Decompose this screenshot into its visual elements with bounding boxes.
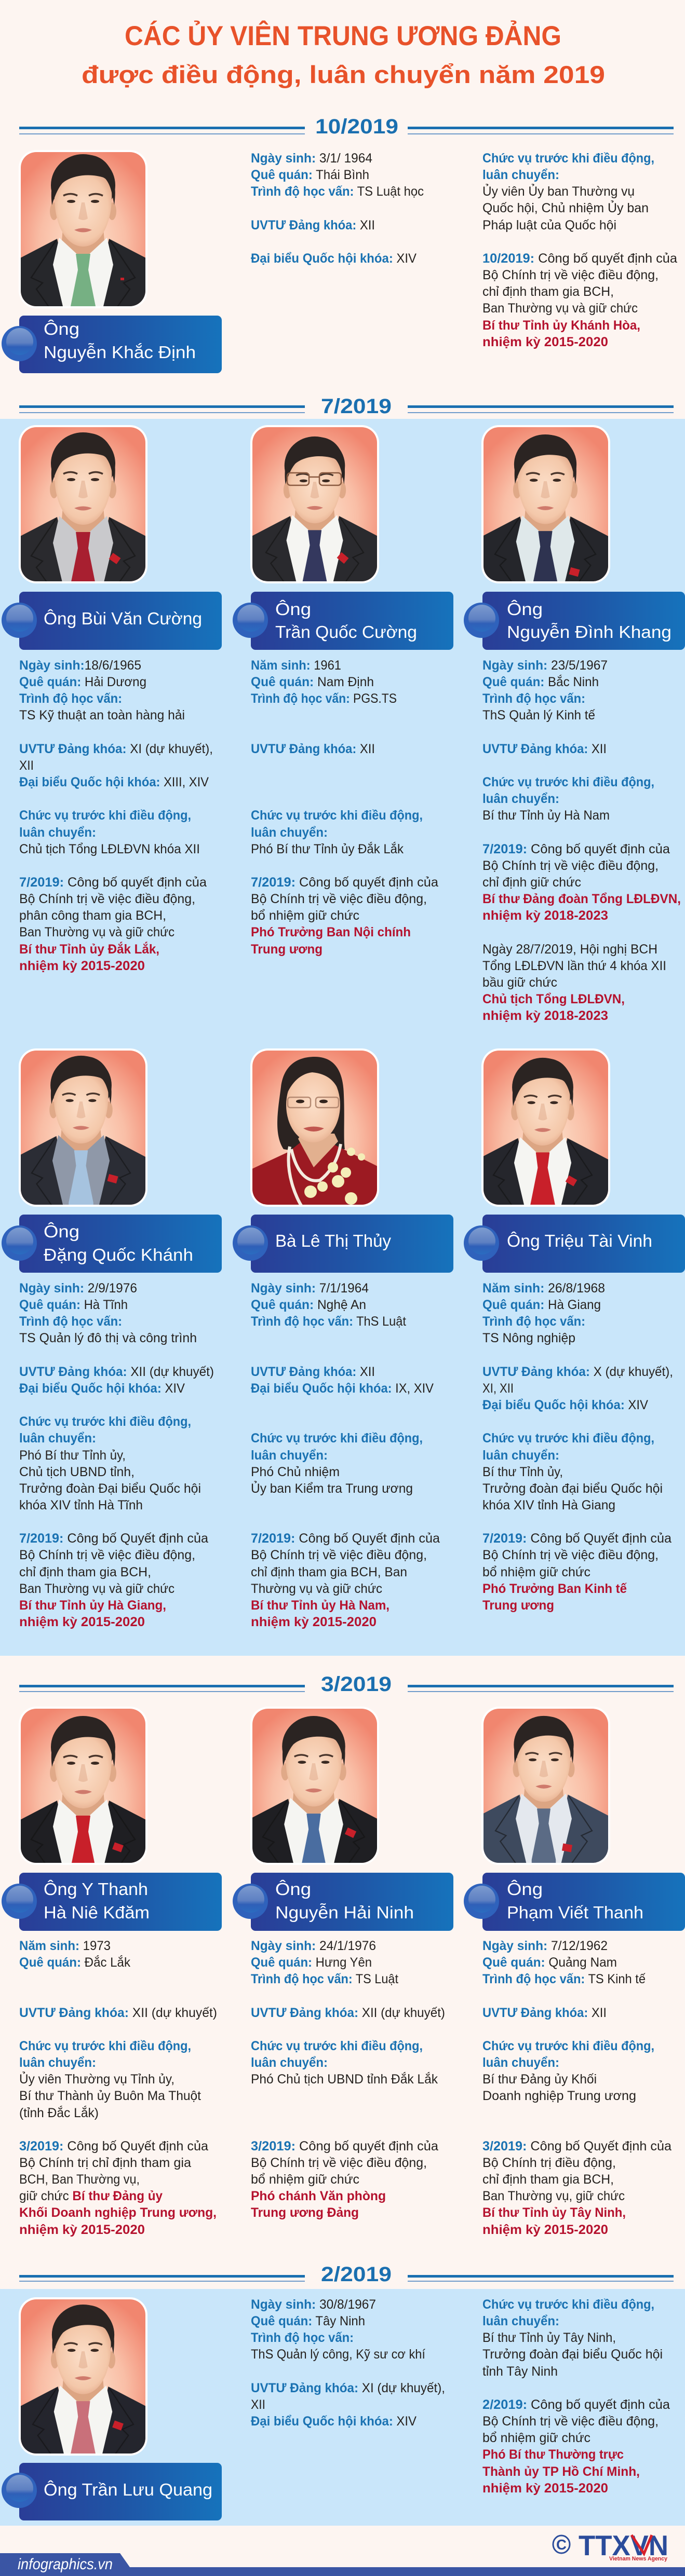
career: Trần Lưu Quang: bổ nhiệm giữ chức [482, 2431, 590, 2445]
career: Trần Lưu Quang: Thành ủy TP Hồ Chí Minh, [482, 2464, 640, 2479]
bio: Y Thanh Hà Niê Kđăm [19, 1939, 217, 2237]
bio: Y Thanh Hà Niê Kđăm: (tỉnh Đắc Lắk) [19, 2105, 99, 2120]
bio: Trần Quốc Cường: Phó Bí thư Tỉnh ủy Đắk Lắk [251, 841, 404, 856]
bio: Trần Quốc Cường: Quê quán: Nam Định [251, 675, 374, 689]
bio: Lê Thị Thủy: chỉ định tham gia BCH, Ban [251, 1565, 407, 1579]
bio: Trần Quốc Cường: Chức vụ trước khi điều động, [251, 808, 423, 823]
bio: Triệu Tài Vinh: Trình độ học vấn: [482, 1314, 585, 1329]
title [82, 20, 605, 88]
section heading: 7/2019 [19, 395, 674, 418]
bio: Trần Lưu Quang: Trình độ học vấn: [251, 2330, 354, 2345]
panel: 2/2019 [0, 2289, 685, 2526]
panel: 7/2019 [0, 419, 685, 1656]
bio: Y Thanh Hà Niê Kđăm: nhiệm kỳ 2015-2020 [19, 2223, 145, 2237]
bio: Nguyễn Đình Khang: Bộ Chính trị về việc điều động, [482, 858, 659, 873]
name banner: Bùi Văn Cường [2, 592, 222, 650]
bio: Lê Thị Thủy: Trình độ học vấn: ThS Luật [251, 1314, 406, 1329]
bio: Nguyễn Đình Khang: Chức vụ trước khi điều động, [482, 775, 654, 789]
bio: Triệu Tài Vinh: Đại biểu Quốc hội khóa: XIV [482, 1398, 648, 1412]
name banner: Trần Quốc Cường: Ông [275, 599, 311, 619]
bio: Y Thanh Hà Niê Kđăm: luân chuyển: [19, 2055, 96, 2070]
section heading: 7/2019: 7/2019 [321, 395, 392, 418]
bio: Nguyễn Hải Ninh: 3/2019: Công bố quyết định của [251, 2139, 438, 2154]
bio: Y Thanh Hà Niê Kđăm: Khối Doanh nghiệp Trung ương, [19, 2205, 217, 2220]
bio: Bùi Văn Cường: phân công tham gia BCH, [19, 908, 166, 923]
portrait: Triệu Tài Vinh [481, 1048, 610, 1207]
bio: Trần Quốc Cường: Bộ Chính trị về việc điều động, [251, 892, 427, 906]
career: Nguyễn Khắc Định: Ủy viên Ủy ban Thường vụ [482, 183, 635, 199]
bio: Trần Lưu Quang: Đại biểu Quốc hội khóa: XIV [251, 2414, 417, 2429]
bio: Triệu Tài Vinh: 7/2019: Công bố Quyết định của [482, 1531, 671, 1546]
bio: Triệu Tài Vinh: Phó Trưởng Ban Kinh tế [482, 1582, 627, 1596]
career: Nguyễn Khắc Định [482, 151, 677, 349]
portrait: Nguyễn Hải Ninh [250, 1707, 379, 1865]
bio: Đặng Quốc Khánh: Trưởng đoàn Đại biểu Quốc hội [19, 1481, 201, 1496]
career: Trần Lưu Quang: Trưởng đoàn đại biểu Quốc hội [482, 2347, 663, 2362]
section heading: 2/2019 [19, 2263, 674, 2286]
portrait: Nguyễn Đình Khang [481, 425, 610, 583]
name banner: Nguyễn Khắc Định: Nguyễn Khắc Định [44, 343, 196, 362]
bio: Trần Lưu Quang [251, 2297, 445, 2429]
name banner: Lê Thị Thủy: Bà Lê Thị Thủy [275, 1231, 391, 1250]
bio: Nguyễn Đình Khang: 7/2019: Công bố quyết định của [482, 842, 670, 856]
career: Nguyễn Khắc Định: Quốc hội, Chủ nhiệm Ủy ban [482, 200, 649, 215]
bio: Đặng Quốc Khánh: Quê quán: Hà Tĩnh [19, 1298, 128, 1312]
bio: Triệu Tài Vinh: TS Nông nghiệp [482, 1331, 575, 1345]
bio: Đặng Quốc Khánh: TS Quản lý đô thị và công trình [19, 1331, 197, 1345]
name banner: Triệu Tài Vinh: Ông Triệu Tài Vinh [507, 1231, 652, 1250]
bio: Lê Thị Thủy: Chức vụ trước khi điều động, [251, 1431, 423, 1446]
section heading: 2/2019: 2/2019 [321, 2263, 392, 2286]
logo: TTXVN: C [556, 2537, 567, 2553]
name banner: Nguyễn Hải Ninh: Ông [275, 1879, 311, 1899]
bio: Nguyễn Đình Khang: bầu giữ chức [482, 975, 557, 990]
bio: Phạm Viết Thanh: Ngày sinh: 7/12/1962 [482, 1939, 608, 1953]
bio: Nguyễn Hải Ninh: Bộ Chính trị về việc điều động, [251, 2156, 427, 2170]
bio: Nguyễn Đình Khang: chỉ định giữ chức [482, 875, 581, 890]
bio: Triệu Tài Vinh: Bộ Chính trị về việc điều động, [482, 1548, 659, 1562]
career: Trần Lưu Quang: Chức vụ trước khi điều động, [482, 2297, 654, 2312]
bio: Nguyễn Khắc Định: Đại biểu Quốc hội khóa: XIV [251, 251, 417, 266]
bio: Trần Quốc Cường: Trung ương [251, 942, 323, 957]
name banner: Nguyễn Hải Ninh [233, 1873, 453, 1931]
portrait: Phạm Viết Thanh [481, 1707, 610, 1865]
career: Trần Lưu Quang: nhiệm kỳ 2015-2020 [482, 2481, 608, 2496]
bio: Triệu Tài Vinh: Quê quán: Hà Giang [482, 1298, 601, 1312]
section heading: 10/2019: 10/2019 [315, 115, 398, 138]
bio: Lê Thị Thủy: Ủy ban Kiểm tra Trung ương [251, 1480, 413, 1496]
career: Trần Lưu Quang [482, 2297, 670, 2496]
name banner: Phạm Viết Thanh: Phạm Viết Thanh [507, 1903, 643, 1922]
name banner: Bùi Văn Cường: Ông Bùi Văn Cường [44, 609, 202, 628]
bio: Nguyễn Khắc Định: UVTƯ Đảng khóa: XII [251, 218, 375, 233]
bio: Bùi Văn Cường: XII [19, 758, 34, 773]
bio: Y Thanh Hà Niê Kđăm: Quê quán: Đắc Lắk [19, 1955, 130, 1970]
bio: Lê Thị Thủy: Ngày sinh: 7/1/1964 [251, 1281, 369, 1296]
name banner: Phạm Viết Thanh [464, 1873, 685, 1931]
section heading: 10/2019 [19, 115, 674, 138]
bio: Đặng Quốc Khánh: chỉ định tham gia BCH, [19, 1565, 151, 1579]
bio: Phạm Viết Thanh: Bí thư Tỉnh ủy Tây Ninh, [482, 2205, 626, 2220]
bio: Triệu Tài Vinh: Bí thư Tỉnh ủy, [482, 1465, 563, 1479]
bio: Triệu Tài Vinh: Năm sinh: 26/8/1968 [482, 1281, 605, 1296]
bio: Trần Lưu Quang: XII [251, 2397, 265, 2412]
career: Nguyễn Khắc Định: luân chuyển: [482, 168, 559, 182]
bio: Đặng Quốc Khánh: Đại biểu Quốc hội khóa: XIV [19, 1381, 185, 1396]
bio: Lê Thị Thủy: Bộ Chính trị về việc điều động, [251, 1548, 427, 1562]
bio: Nguyễn Hải Ninh: Ngày sinh: 24/1/1976 [251, 1939, 376, 1953]
bio: Bùi Văn Cường: Quê quán: Hải Dương [19, 675, 146, 689]
bio: Y Thanh Hà Niê Kđăm: 3/2019: Công bố Quyết định của [19, 2139, 208, 2154]
section heading: 3/2019 [19, 1673, 674, 1696]
portrait: Đặng Quốc Khánh [19, 1048, 147, 1207]
career: Nguyễn Khắc Định: Chức vụ trước khi điều động, [482, 151, 654, 166]
bio: Bùi Văn Cường: TS Kỹ thuật an toàn hàng hải [19, 708, 185, 723]
portrait: Y Thanh Hà Niê Kđăm [19, 1707, 147, 1865]
bio: Triệu Tài Vinh: Chức vụ trước khi điều động, [482, 1431, 654, 1446]
bio: Đặng Quốc Khánh: Chức vụ trước khi điều động, [19, 1414, 191, 1429]
bio: Nguyễn Khắc Định [251, 151, 424, 266]
bio: Phạm Viết Thanh: Doanh nghiệp Trung ương [482, 2089, 636, 2103]
bio: Trần Lưu Quang: Quê quán: Tây Ninh [251, 2314, 365, 2328]
bio: Trần Quốc Cường: Phó Trưởng Ban Nội chính [251, 925, 411, 939]
name banner: Đặng Quốc Khánh [2, 1215, 222, 1273]
name banner: Nguyễn Đình Khang: Nguyễn Đình Khang [507, 622, 671, 642]
bio: Triệu Tài Vinh: khóa XIV tỉnh Hà Giang [482, 1498, 615, 1512]
bio: Bùi Văn Cường: Bộ Chính trị về việc điều động, [19, 892, 195, 906]
bio: Nguyễn Hải Ninh: Phó chánh Văn phòng [251, 2189, 386, 2203]
name banner: Nguyễn Khắc Định [2, 316, 222, 373]
bio: Bùi Văn Cường: Chủ tịch Tổng LĐLĐVN khóa XII [19, 842, 200, 856]
bio: Lê Thị Thủy: Phó Chủ nhiệm [251, 1465, 340, 1479]
bio: Bùi Văn Cường: Bí thư Tỉnh ủy Đắk Lắk, [19, 941, 159, 957]
name banner: Triệu Tài Vinh [464, 1215, 685, 1273]
bio: Triệu Tài Vinh [482, 1281, 673, 1613]
bio: Nguyễn Đình Khang: luân chuyển: [482, 792, 559, 806]
career: Trần Lưu Quang: Phó Bí thư Thường trực [482, 2447, 624, 2462]
bio: Y Thanh Hà Niê Kđăm: Bí thư Thành ủy Buôn Ma Thuột [19, 2089, 201, 2103]
name banner: Đặng Quốc Khánh: Đặng Quốc Khánh [44, 1245, 193, 1264]
bio: Nguyễn Đình Khang: Quê quán: Bắc Ninh [482, 674, 599, 689]
bio: Triệu Tài Vinh: XI, XII [482, 1381, 514, 1396]
portrait: Nguyễn Khắc Định [19, 150, 147, 308]
bio: Phạm Viết Thanh: Trình độ học vấn: TS Kinh tế [482, 1972, 646, 1986]
bio: Lê Thị Thủy: 7/2019: Công bố Quyết định của [251, 1531, 440, 1546]
bio: Lê Thị Thủy: Bí thư Tỉnh ủy Hà Nam, [251, 1598, 389, 1613]
bio: Nguyễn Đình Khang: Tổng LĐLĐVN lần thứ 4 khóa XII [482, 959, 666, 973]
bio: Trần Lưu Quang: ThS Quản lý công, Kỹ sư cơ khí [251, 2347, 425, 2362]
name banner: Trần Quốc Cường [233, 592, 453, 650]
bio: Y Thanh Hà Niê Kđăm: Năm sinh: 1973 [19, 1939, 111, 1953]
bio: Y Thanh Hà Niê Kđăm: Bộ Chính trị chỉ định tham gia [19, 2156, 191, 2170]
bio: Trần Quốc Cường: luân chuyển: [251, 825, 328, 840]
name banner: Nguyễn Khắc Định: Ông [44, 319, 79, 338]
bio: Nguyễn Hải Ninh: bổ nhiệm giữ chức [251, 2172, 359, 2187]
bio: Nguyễn Đình Khang: Bí thư Đảng đoàn Tổng LĐLĐVN, [482, 892, 681, 906]
bio: Nguyễn Hải Ninh: Quê quán: Hưng Yên [251, 1955, 372, 1970]
career: Trần Lưu Quang: tỉnh Tây Ninh [482, 2364, 558, 2379]
bio: Triệu Tài Vinh: Trung ương [482, 1598, 554, 1613]
career: Trần Lưu Quang: Bí thư Tỉnh ủy Tây Ninh, [482, 2330, 616, 2345]
bio: Nguyễn Đình Khang: ThS Quản lý Kinh tế [482, 708, 595, 723]
bio: Bùi Văn Cường: Chức vụ trước khi điều động, [19, 808, 191, 823]
bio: Bùi Văn Cường: Ban Thường vụ và giữ chức [19, 925, 174, 939]
bio: Phạm Viết Thanh: Ban Thường vụ, giữ chức [482, 2189, 625, 2203]
bio: Đặng Quốc Khánh: Bí thư Tỉnh ủy Hà Giang, [19, 1598, 166, 1613]
name banner: Y Thanh Hà Niê Kđăm [2, 1873, 222, 1931]
bio: Đặng Quốc Khánh [19, 1281, 214, 1629]
bio: Trần Quốc Cường: bổ nhiệm giữ chức [251, 908, 359, 923]
bio: Nguyễn Hải Ninh: Trình độ học vấn: TS Luật [251, 1972, 398, 1986]
bio: Đặng Quốc Khánh: nhiệm kỳ 2015-2020 [19, 1615, 145, 1629]
section heading: 3/2019: 3/2019 [321, 1673, 392, 1696]
bio: Nguyễn Hải Ninh: Trung ương Đảng [251, 2205, 359, 2220]
bio: Nguyễn Hải Ninh: luân chuyển: [251, 2055, 328, 2070]
bio: Đặng Quốc Khánh: Trình độ học vấn: [19, 1314, 122, 1329]
bio: Phạm Viết Thanh: 3/2019: Công bố Quyết định của [482, 2139, 671, 2154]
portrait: Trần Lưu Quang [19, 2297, 147, 2456]
bio: Nguyễn Đình Khang: Ngày sinh: 23/5/1967 [482, 658, 608, 673]
bio: Đặng Quốc Khánh: UVTƯ Đảng khóa: XII (dự khuyết) [19, 1365, 214, 1379]
bio: Trần Lưu Quang: Ngày sinh: 30/8/1967 [251, 2297, 376, 2312]
bio: Lê Thị Thủy: nhiệm kỳ 2015-2020 [251, 1615, 377, 1629]
bio: Bùi Văn Cường: Đại biểu Quốc hội khóa: XIII, XIV [19, 775, 209, 789]
bio: Lê Thị Thủy: Thường vụ và giữ chức [251, 1582, 382, 1596]
bio: Triệu Tài Vinh: bổ nhiệm giữ chức [482, 1565, 590, 1579]
title: được điều động, luân chuyển năm 2019 [82, 61, 605, 88]
bio: Nguyễn Đình Khang: nhiệm kỳ 2018-2023 [482, 1008, 608, 1023]
career: Nguyễn Khắc Định: Pháp luật của Quốc hội [482, 218, 616, 233]
bio: Nguyễn Hải Ninh: Phó Chủ tịch UBND tỉnh Đắk Lắk [251, 2071, 438, 2087]
bio: Triệu Tài Vinh: Trưởng đoàn đại biểu Quốc hội [482, 1481, 663, 1496]
bio: Trần Quốc Cường: 7/2019: Công bố quyết định của [251, 875, 438, 890]
bio: Bùi Văn Cường: nhiệm kỳ 2015-2020 [19, 959, 145, 973]
name banner: Trần Lưu Quang: Ông Trần Lưu Quang [44, 2480, 212, 2499]
bio: Trần Quốc Cường: Năm sinh: 1961 [251, 658, 341, 673]
name banner: Y Thanh Hà Niê Kđăm: Hà Niê Kđăm [44, 1903, 150, 1922]
bio: Trần Quốc Cường: Trình độ học vấn: PGS.TS [251, 691, 397, 706]
bio: Nguyễn Khắc Định: Trình độ học vấn: TS Luật học [251, 184, 424, 199]
bio: Phạm Viết Thanh [482, 1939, 671, 2237]
career: Nguyễn Khắc Định: Bộ Chính trị về việc điều động, [482, 268, 659, 282]
bio: Nguyễn Đình Khang: Bí thư Tỉnh ủy Hà Nam [482, 808, 610, 823]
portrait: Lê Thị Thủy [250, 1048, 380, 1207]
bio: Y Thanh Hà Niê Kđăm: giữ chức Bí thư Đảng ủy [19, 2189, 163, 2203]
bio: Phạm Viết Thanh: Quê quán: Quảng Nam [482, 1955, 617, 1970]
bio: Lê Thị Thủy [251, 1281, 440, 1629]
bio: Phạm Viết Thanh: Bí thư Đảng ủy Khối [482, 2072, 597, 2087]
bio: Phạm Viết Thanh: luân chuyển: [482, 2055, 559, 2070]
bio: Đặng Quốc Khánh: Phó Bí thư Tỉnh ủy, [19, 1448, 126, 1463]
footer band [0, 2553, 685, 2576]
bio: Phạm Viết Thanh: Chức vụ trước khi điều động, [482, 2039, 654, 2053]
bio: Nguyễn Đình Khang: UVTƯ Đảng khóa: XII [482, 742, 607, 756]
bio: Trần Lưu Quang: UVTƯ Đảng khóa: XI (dự khuyết), [251, 2381, 445, 2395]
title: CÁC ỦY VIÊN TRUNG ƯƠNG ĐẢNG [125, 20, 561, 51]
bio: Bùi Văn Cường: Ngày sinh:18/6/1965 [19, 658, 141, 673]
bio: Y Thanh Hà Niê Kđăm: Ủy viên Thường vụ Tỉnh ủy, [19, 2071, 174, 2087]
bio: Đặng Quốc Khánh: khóa XIV tỉnh Hà Tĩnh [19, 1498, 143, 1512]
bio: Nguyễn Đình Khang [482, 658, 681, 1023]
bio: Triệu Tài Vinh: luân chuyển: [482, 1448, 559, 1463]
bio: Đặng Quốc Khánh: 7/2019: Công bố Quyết định của [19, 1531, 208, 1546]
career: Trần Lưu Quang: 2/2019: Công bố quyết định của [482, 2397, 670, 2412]
logo: TTXVN: TTXVN [579, 2529, 668, 2561]
bio: Lê Thị Thủy: UVTƯ Đảng khóa: XII [251, 1365, 375, 1379]
name banner: Nguyễn Đình Khang [464, 592, 685, 650]
footer band: infographics.vn [18, 2556, 113, 2573]
bio: Bùi Văn Cường: luân chuyển: [19, 825, 96, 840]
portrait: Trần Quốc Cường [250, 425, 379, 583]
bio: Nguyễn Hải Ninh: UVTƯ Đảng khóa: XII (dự khuyết) [251, 2006, 445, 2020]
bio: Đặng Quốc Khánh: Bộ Chính trị về việc điều động, [19, 1548, 195, 1562]
career: Trần Lưu Quang: luân chuyển: [482, 2314, 559, 2328]
bio: Y Thanh Hà Niê Kđăm: UVTƯ Đảng khóa: XII (dự khuyết) [19, 2006, 217, 2020]
bio: Lê Thị Thủy: Quê quán: Nghệ An [251, 1298, 366, 1312]
bio: Đặng Quốc Khánh: luân chuyển: [19, 1431, 96, 1446]
career: Nguyễn Khắc Định: Ban Thường vụ và giữ chức [482, 301, 638, 316]
bio: Nguyễn Đình Khang: nhiệm kỳ 2018-2023 [482, 908, 608, 923]
bio: Bùi Văn Cường: 7/2019: Công bố quyết định của [19, 875, 207, 890]
bio: Nguyễn Đình Khang: Trình độ học vấn: [482, 691, 585, 706]
portrait: Bùi Văn Cường [19, 425, 147, 583]
bio: Bùi Văn Cường [19, 658, 213, 973]
bio: Nguyễn Đình Khang: Chủ tịch Tổng LĐLĐVN, [482, 992, 625, 1006]
bio: Đặng Quốc Khánh: Ngày sinh: 2/9/1976 [19, 1281, 137, 1296]
name banner: Y Thanh Hà Niê Kđăm: Ông Y Thanh [44, 1879, 148, 1899]
bio: Trần Quốc Cường [251, 658, 438, 957]
bio: Nguyễn Khắc Định: Quê quán: Thái Bình [251, 168, 369, 182]
bio: Đặng Quốc Khánh: Ban Thường vụ và giữ chức [19, 1582, 174, 1596]
name banner: Trần Quốc Cường: Trần Quốc Cường [275, 622, 417, 642]
career: Trần Lưu Quang: Bộ Chính trị về việc điều động, [482, 2414, 659, 2429]
bio: Y Thanh Hà Niê Kđăm: Chức vụ trước khi điều động, [19, 2039, 191, 2053]
name banner: Lê Thị Thủy [233, 1215, 453, 1273]
bio: Nguyễn Khắc Định: Ngày sinh: 3/1/ 1964 [251, 151, 372, 166]
career: Nguyễn Khắc Định: Bí thư Tỉnh ủy Khánh Hòa, [482, 318, 640, 333]
name banner: Nguyễn Đình Khang: Ông [507, 599, 543, 619]
logo: TTXVN: Vietnam News Agency [609, 2556, 668, 2562]
bio: Lê Thị Thủy: Đại biểu Quốc hội khóa: IX, XIV [251, 1381, 434, 1396]
name banner: Phạm Viết Thanh: Ông [507, 1879, 543, 1899]
bio: Nguyễn Hải Ninh [251, 1939, 445, 2220]
bio: Phạm Viết Thanh: chỉ định tham gia BCH, [482, 2172, 614, 2187]
name banner: Nguyễn Hải Ninh: Nguyễn Hải Ninh [275, 1903, 414, 1922]
bio: Lê Thị Thủy: luân chuyển: [251, 1448, 328, 1463]
bio: Triệu Tài Vinh: UVTƯ Đảng khóa: X (dự khuyết), [482, 1365, 673, 1379]
bio: Y Thanh Hà Niê Kđăm: BCH, Ban Thường vụ, [19, 2172, 140, 2187]
name banner: Đặng Quốc Khánh: Ông [44, 1222, 79, 1241]
career: Nguyễn Khắc Định: chỉ định tham gia BCH, [482, 284, 614, 299]
bio: Bùi Văn Cường: Trình độ học vấn: [19, 691, 122, 706]
career: Nguyễn Khắc Định: nhiệm kỳ 2015-2020 [482, 335, 608, 349]
bio: Phạm Viết Thanh: UVTƯ Đảng khóa: XII [482, 2006, 607, 2020]
name banner: Trần Lưu Quang [2, 2463, 222, 2520]
bio: Phạm Viết Thanh: nhiệm kỳ 2015-2020 [482, 2223, 608, 2237]
bio: Trần Quốc Cường: UVTƯ Đảng khóa: XII [251, 742, 375, 756]
bio: Bùi Văn Cường: UVTƯ Đảng khóa: XI (dự khuyết), [19, 742, 213, 756]
bio: Phạm Viết Thanh: Bộ Chính trị điều động, [482, 2156, 616, 2170]
career: Nguyễn Khắc Định: 10/2019: Công bố quyết định của [482, 251, 677, 266]
bio: Nguyễn Hải Ninh: Chức vụ trước khi điều động, [251, 2039, 423, 2053]
bio: Đặng Quốc Khánh: Chủ tịch UBND tỉnh, [19, 1465, 135, 1479]
bio: Nguyễn Đình Khang: Ngày 28/7/2019, Hội nghị BCH [482, 942, 657, 957]
